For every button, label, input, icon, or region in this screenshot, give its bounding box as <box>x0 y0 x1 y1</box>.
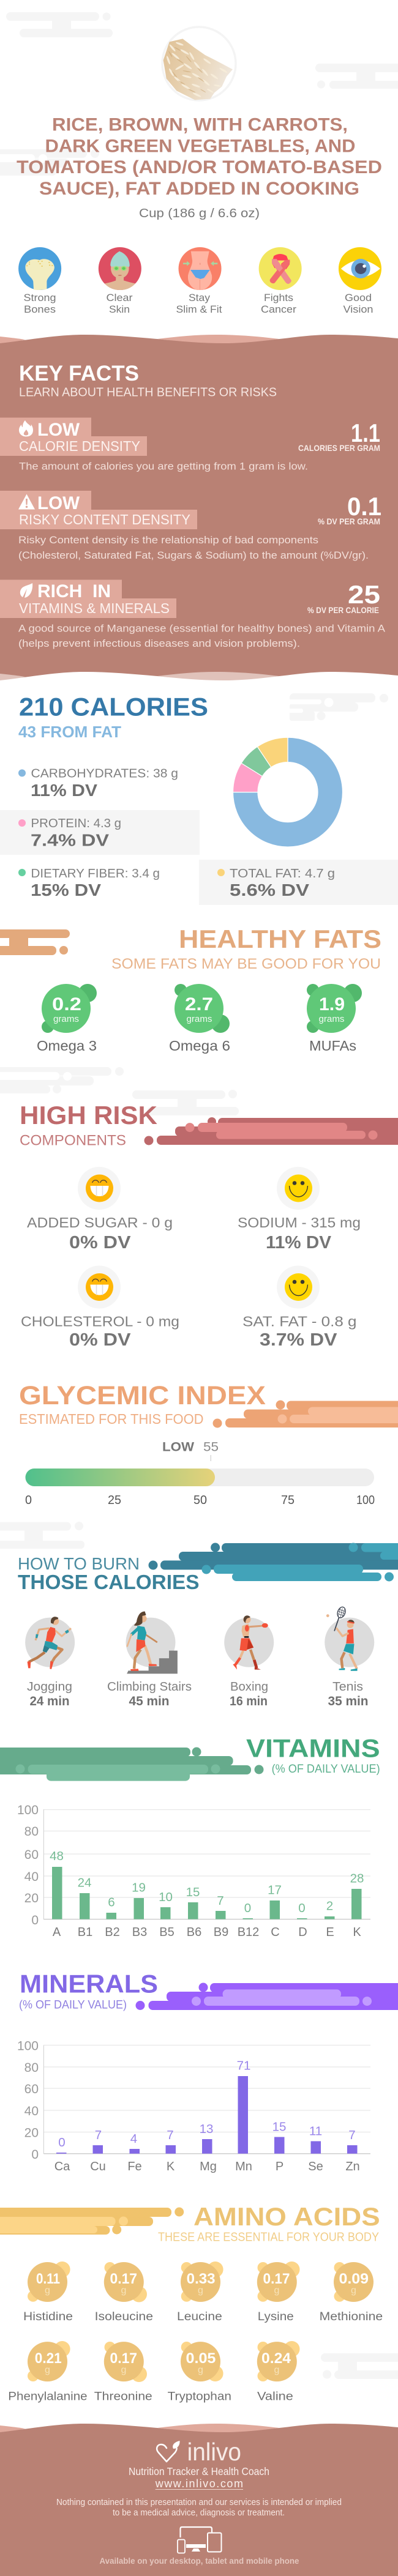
bar chart: vitamins: B12 <box>238 1926 259 1939</box>
risk item: saturated fat: SAT. FAT - 0.8 g <box>242 1313 356 1329</box>
activity labels: 24 min <box>29 1694 70 1708</box>
bar chart: minerals: 20 <box>24 2126 39 2140</box>
bar chart: vitamins: 80 <box>24 1825 39 1839</box>
amino stat: lysine: Lysine <box>258 2310 294 2323</box>
amino stat: tryptophan: 0.05 <box>186 2350 216 2367</box>
bar chart: minerals: 100 <box>17 2039 39 2053</box>
bar chart: minerals: 4 <box>130 2132 137 2146</box>
stat: mufas: 1.9 <box>319 994 345 1014</box>
icon labels: Slim & Fit <box>176 303 222 315</box>
activity labels: 45 min <box>129 1694 169 1708</box>
bar chart: minerals: 7 <box>95 2128 102 2142</box>
figure: boxing <box>224 1615 274 1670</box>
bar chart: minerals: 7 <box>348 2128 356 2142</box>
legend: dietary fiber: 15% DV <box>31 880 101 899</box>
heading: glycemic index: GLYCEMIC INDEX <box>19 1381 266 1410</box>
icon: slim and fit <box>179 247 222 290</box>
stat: mufas: grams <box>318 1014 344 1024</box>
amino stat: isoleucine <box>95 2262 153 2323</box>
heading: how to burn: HOW TO BURN <box>18 1554 140 1573</box>
legend: dietary fiber: DIETARY FIBER: 3.4 g <box>31 867 160 880</box>
risk item: saturated fat: 3.7% DV <box>260 1330 337 1350</box>
bar chart: minerals: 7 <box>167 2128 174 2142</box>
legend: protein <box>0 810 200 855</box>
panel: key facts <box>0 335 398 688</box>
risk item: sodium: 11% DV <box>266 1233 331 1253</box>
amino stat: isoleucine: g <box>121 2285 126 2296</box>
bar chart: vitamins: B5 <box>159 1926 175 1939</box>
bar chart: vitamins: 19 <box>132 1881 146 1894</box>
decorative clouds: above high risk <box>0 1067 239 1115</box>
subheading: components: COMPONENTS <box>20 1132 126 1149</box>
legend: carbohydrates: 11% DV <box>31 781 97 800</box>
amino stat: leucine <box>177 2261 223 2323</box>
fact: calorie density: LOW <box>37 420 80 440</box>
gauge scale: 25 <box>108 1494 121 1507</box>
gauge scale: 75 <box>281 1494 295 1507</box>
stat: omega 6: Omega 6 <box>169 1038 230 1054</box>
fact: risky content density: LOW <box>37 493 80 513</box>
activity labels: 16 min <box>230 1694 268 1708</box>
logo: inlivo <box>157 2438 241 2466</box>
activity labels: Climbing Stairs <box>107 1680 192 1694</box>
bar chart: vitamins: 17 <box>268 1883 282 1897</box>
fact: vitamins and minerals: % DV PER CALORIE <box>307 605 379 615</box>
bar chart: vitamins: 0 <box>298 1901 306 1915</box>
fact: calorie density: The amount of calories you are getting from 1 gram is low. <box>19 460 308 472</box>
figure: tennis <box>325 1606 374 1671</box>
stat: omega 6: 2.7 <box>185 994 213 1014</box>
amino stat: phenylalanine: g <box>45 2365 50 2375</box>
icon labels <box>23 292 374 315</box>
gauge scale: 100 <box>356 1494 375 1507</box>
heading: calories: 210 CALORIES <box>19 693 208 721</box>
risk item: added sugar: ADDED SUGAR - 0 g <box>27 1215 173 1230</box>
activity labels <box>27 1680 369 1708</box>
bar chart: minerals <box>17 2039 370 2173</box>
fact: risky content density: Risky Content density is the relationship of bad components <box>18 534 318 546</box>
bar chart: vitamins: 20 <box>24 1891 39 1905</box>
bar chart: vitamins: 40 <box>24 1870 39 1884</box>
fact: calorie density <box>0 417 380 472</box>
decorative cloud: top left <box>6 12 113 37</box>
activity labels: Boxing <box>230 1680 268 1694</box>
icon labels: Skin <box>109 303 130 315</box>
bar chart: vitamins: 48 <box>50 1849 64 1863</box>
tagline: Nutrition Tracker & Health Coach <box>129 2465 269 2477</box>
subheading: percent of daily value: (% OF DAILY VALUE) <box>19 1998 127 2011</box>
bar chart: minerals: 0 <box>31 2148 39 2162</box>
bar chart: vitamins: 2 <box>326 1899 333 1913</box>
stat: omega 3: Omega 3 <box>37 1038 97 1054</box>
stat: omega 3: 0.2 <box>52 994 81 1014</box>
section: minerals <box>17 1969 398 2173</box>
fact: vitamins and minerals <box>0 580 386 649</box>
bar chart: vitamins: 28 <box>350 1871 364 1886</box>
decorative banner: vitamins <box>0 1748 263 1781</box>
section: amino acids <box>0 2202 383 2403</box>
decorative cloud: behind title <box>0 149 99 176</box>
gauge scale: 50 <box>193 1494 207 1507</box>
gauge label: 55 <box>203 1440 219 1454</box>
heading: key facts: LEARN ABOUT HEALTH BENEFITS OR RISKS <box>19 385 277 399</box>
fact: calorie density: 1.1 <box>351 419 380 447</box>
stat: omega 6: grams <box>186 1014 212 1024</box>
amino stat: histidine: 0.11 <box>36 2271 60 2287</box>
decorative banner: glycemic <box>213 1400 398 1428</box>
amino stat: methionine: 0.09 <box>339 2271 369 2287</box>
icon: warning triangle <box>18 494 35 509</box>
logo: inlivo: inlivo <box>187 2438 241 2466</box>
amino stat: histidine: g <box>45 2285 50 2296</box>
icon labels: Fights <box>264 292 293 303</box>
bar chart: minerals: Mn <box>235 2160 252 2173</box>
subheading: from fat: 43 FROM FAT <box>18 724 121 741</box>
decorative banner: amino acids <box>0 2208 184 2235</box>
bar chart: vitamins: B3 <box>132 1926 147 1939</box>
section: calories <box>0 693 398 905</box>
bar chart: vitamins: B9 <box>214 1926 228 1939</box>
bar chart: minerals: 71 <box>237 2059 250 2073</box>
icon: devices <box>178 2527 222 2553</box>
fact: risky content density: RISKY CONTENT DENSITY <box>19 512 190 527</box>
bar chart: minerals: Zn <box>345 2160 360 2173</box>
bar chart: minerals: Cu <box>90 2160 106 2173</box>
section: vitamins <box>0 1734 380 1939</box>
bar chart: vitamins: 10 <box>159 1890 173 1904</box>
amino stat: methionine <box>320 2262 383 2323</box>
gauge scale <box>25 1494 375 1507</box>
legend: carbohydrates <box>18 767 178 800</box>
bar chart: vitamins: D <box>298 1926 307 1939</box>
fact: vitamins and minerals: 25 <box>348 580 380 609</box>
title: DARK GREEN VEGETABLES, AND <box>45 136 355 157</box>
fact: vitamins and minerals: A good source of Manganese (essential for healthy bones) and Vitamin A <box>18 623 386 634</box>
gauge label: LOW <box>162 1440 194 1454</box>
stat: mufas <box>307 984 362 1054</box>
amino stat: threonine <box>94 2342 152 2403</box>
decorative cloud: top right <box>315 64 398 89</box>
amino stat: valine: Valine <box>257 2390 293 2403</box>
bar chart: vitamins <box>17 1803 370 1939</box>
amino stat: isoleucine: Isoleucine <box>95 2310 153 2323</box>
bar chart: vitamins: 7 <box>217 1894 224 1908</box>
risk item: added sugar <box>27 1167 173 1253</box>
heading: healthy fats: HEALTHY FATS <box>179 925 381 953</box>
icon: strong bones <box>18 247 61 290</box>
heading: key facts: KEY FACTS <box>19 362 139 385</box>
amino stat: leucine: Leucine <box>177 2310 222 2323</box>
activity labels: Jogging <box>27 1680 72 1694</box>
bar chart: vitamins: 0 <box>244 1901 251 1915</box>
legend: total fat: TOTAL FAT: 4.7 g <box>230 867 335 880</box>
icon labels: Stay <box>189 292 210 303</box>
fact: risky content density: 0.1 <box>347 492 381 521</box>
amino stat: tryptophan: Tryptophan <box>168 2390 231 2403</box>
amino stat: lysine: g <box>274 2285 279 2296</box>
heading: key facts <box>19 362 277 399</box>
bar chart: minerals: 0 <box>58 2135 66 2150</box>
fact: calorie density: CALORIE DENSITY <box>19 438 140 454</box>
amino stat: phenylalanine: 0.21 <box>35 2350 62 2367</box>
fact: vitamins and minerals: (helps prevent infectious diseases and vision problems). <box>18 638 300 649</box>
stat: omega 3 <box>37 984 97 1054</box>
bar chart: minerals: Fe <box>127 2160 142 2173</box>
availability note: Available on your desktop, tablet and mobile phone <box>99 2556 299 2566</box>
legend: protein: 7.4% DV <box>31 831 109 849</box>
gauge label <box>162 1440 219 1461</box>
title: SAUCE), FAT ADDED IN COOKING <box>39 179 359 199</box>
icon: leaf <box>20 583 32 598</box>
figure: climbing stairs <box>126 1612 178 1673</box>
heading: amino acids: AMINO ACIDS <box>193 2202 380 2231</box>
section: high risk <box>20 1101 398 1350</box>
amino stat: histidine <box>23 2261 73 2323</box>
bar chart: minerals: 60 <box>24 2082 39 2096</box>
icon labels: Strong <box>23 292 56 303</box>
legend: total fat: 5.6% DV <box>230 880 309 899</box>
section: healthy fats <box>0 925 381 1054</box>
title <box>17 115 382 199</box>
bar chart: minerals: 11 <box>309 2124 322 2138</box>
legend: dietary fiber <box>18 867 160 899</box>
amino stat: lysine: 0.17 <box>263 2271 290 2287</box>
bar chart: vitamins: 15 <box>186 1885 200 1899</box>
disclaimer: to be a medical advice, diagnosis or treatment. <box>113 2508 285 2518</box>
bar chart: minerals: 13 <box>200 2122 213 2136</box>
risk item: sodium: SODIUM - 315 mg <box>238 1215 361 1230</box>
stat: omega 6 <box>169 984 230 1054</box>
amino stat: lysine <box>257 2261 300 2323</box>
gauge bar <box>26 1469 374 1486</box>
risk item: saturated fat <box>242 1265 356 1350</box>
bar chart: minerals: Se <box>308 2160 323 2173</box>
icon: flame <box>19 420 33 437</box>
donut chart <box>233 737 343 847</box>
amino stat: valine: 0.24 <box>261 2350 291 2367</box>
amino stat: phenylalanine: Phenylalanine <box>8 2390 88 2403</box>
bar chart: vitamins: 0 <box>31 1913 39 1927</box>
bar chart: vitamins: 6 <box>108 1896 115 1910</box>
amino stat: valine <box>257 2341 300 2403</box>
title: TOMATOES (AND/OR TOMATO-BASED <box>17 157 382 177</box>
food image: rice <box>162 27 236 100</box>
bar chart: vitamins: B2 <box>105 1926 120 1939</box>
bar chart: minerals: P <box>276 2160 283 2173</box>
activity labels: 35 min <box>328 1694 369 1708</box>
serving size: Cup (186 g / 6.6 oz) <box>139 206 260 220</box>
icon labels: Vision <box>343 303 374 315</box>
fact: vitamins and minerals: VITAMINS & MINERALS <box>19 600 170 616</box>
decorative banner: high risk <box>145 1117 398 1145</box>
fact: vitamins and minerals: RICH IN <box>37 581 111 601</box>
decorative cloud: calories <box>288 693 388 721</box>
decorative banner: healthy fats <box>0 929 70 955</box>
amino stat: threonine: Threonine <box>94 2390 152 2403</box>
legend: protein: PROTEIN: 4.3 g <box>31 817 121 830</box>
stat: omega 3: grams <box>53 1014 79 1024</box>
risk item: added sugar: 0% DV <box>69 1233 131 1253</box>
amino stat: tryptophan <box>168 2342 231 2403</box>
decorative banner: minerals <box>136 1982 398 2010</box>
fact: risky content density: % DV PER GRAM <box>318 516 380 526</box>
amino stat: valine: g <box>274 2365 279 2375</box>
risk item: cholesterol <box>21 1265 179 1350</box>
bar chart: vitamins: 24 <box>78 1875 91 1889</box>
gauge scale: 0 <box>25 1494 32 1507</box>
amino stat: phenylalanine <box>8 2341 88 2403</box>
amino stat: leucine: 0.33 <box>187 2271 216 2287</box>
amino stat: isoleucine: 0.17 <box>110 2271 137 2287</box>
amino stat: methionine: g <box>351 2285 356 2296</box>
bar chart: vitamins: B6 <box>187 1926 201 1939</box>
fact: risky content density <box>0 491 381 561</box>
bar chart: vitamins: E <box>326 1926 334 1939</box>
bar chart: minerals: 15 <box>272 2120 286 2134</box>
bar chart: vitamins: C <box>271 1926 280 1939</box>
icon labels: Bones <box>24 303 56 315</box>
title: RICE, BROWN, WITH CARROTS, <box>52 115 348 135</box>
amino stat: threonine: g <box>121 2365 126 2375</box>
stat: mufas: MUFAs <box>309 1038 356 1054</box>
fact: calorie density: CALORIES PER GRAM <box>298 443 380 453</box>
bar chart: minerals: Mg <box>200 2160 217 2173</box>
bar chart: vitamins: K <box>353 1926 361 1939</box>
section: glycemic index <box>19 1381 398 1507</box>
icon: clear skin <box>99 247 141 290</box>
decorative cloud: above burn <box>0 1522 84 1549</box>
bar chart: minerals: 80 <box>24 2061 39 2075</box>
bar chart: minerals: 40 <box>24 2104 39 2118</box>
bar chart: vitamins: 100 <box>17 1803 39 1817</box>
figure: jogging <box>25 1617 75 1669</box>
risk item: sodium <box>238 1167 361 1253</box>
icon: fights cancer ribbon <box>259 247 302 290</box>
disclaimer <box>56 2498 342 2518</box>
panel: footer <box>0 2424 398 2576</box>
amino stat: threonine: 0.17 <box>110 2350 137 2367</box>
subheading: healthy fats: SOME FATS MAY BE GOOD FOR YOU <box>111 956 381 972</box>
website link: www.inlivo.com <box>155 2477 243 2490</box>
section: how to burn <box>18 1543 398 1708</box>
amino stat: leucine: g <box>198 2285 203 2296</box>
risk item: cholesterol: CHOLESTEROL - 0 mg <box>21 1313 179 1329</box>
bar chart: vitamins: B1 <box>78 1926 92 1939</box>
risk item: cholesterol: 0% DV <box>69 1330 131 1350</box>
amino stat: histidine: Histidine <box>23 2310 73 2323</box>
legend: carbohydrates: CARBOHYDRATES: 38 g <box>31 767 178 781</box>
decorative banner: burn <box>148 1543 398 1581</box>
subheading: estimated: ESTIMATED FOR THIS FOOD <box>19 1411 203 1427</box>
amino stat: tryptophan: g <box>198 2365 203 2375</box>
disclaimer: Nothing contained in this presentation and our services is intended or implied <box>56 2498 342 2507</box>
icon labels: Clear <box>107 292 133 303</box>
bar chart: minerals: K <box>167 2160 175 2173</box>
legend: total fat <box>199 860 398 905</box>
heading: those calories: THOSE CALORIES <box>18 1571 200 1593</box>
icon labels: Good <box>345 292 372 303</box>
decorative cloud: amino right <box>321 2353 398 2379</box>
benefit icons row <box>18 247 381 315</box>
bar chart: vitamins: 60 <box>24 1848 39 1862</box>
icon: good vision eye <box>339 247 381 290</box>
bar chart: minerals: Ca <box>54 2160 70 2173</box>
heading: vitamins: VITAMINS <box>246 1734 380 1762</box>
subheading: percent of daily value: (% OF DAILY VALUE) <box>272 1762 380 1776</box>
activity labels: Tenis <box>332 1680 363 1694</box>
heading: high risk: HIGH RISK <box>20 1101 157 1130</box>
amino stat: methionine: Methionine <box>320 2310 383 2323</box>
heading: minerals: MINERALS <box>20 1969 158 1998</box>
icon labels: Cancer <box>261 303 296 315</box>
fact: risky content density: (Cholesterol, Saturated Fat, Sugars & Sodium) to the amount (%DV/gr). <box>18 549 369 561</box>
bar chart: vitamins: A <box>53 1926 61 1939</box>
